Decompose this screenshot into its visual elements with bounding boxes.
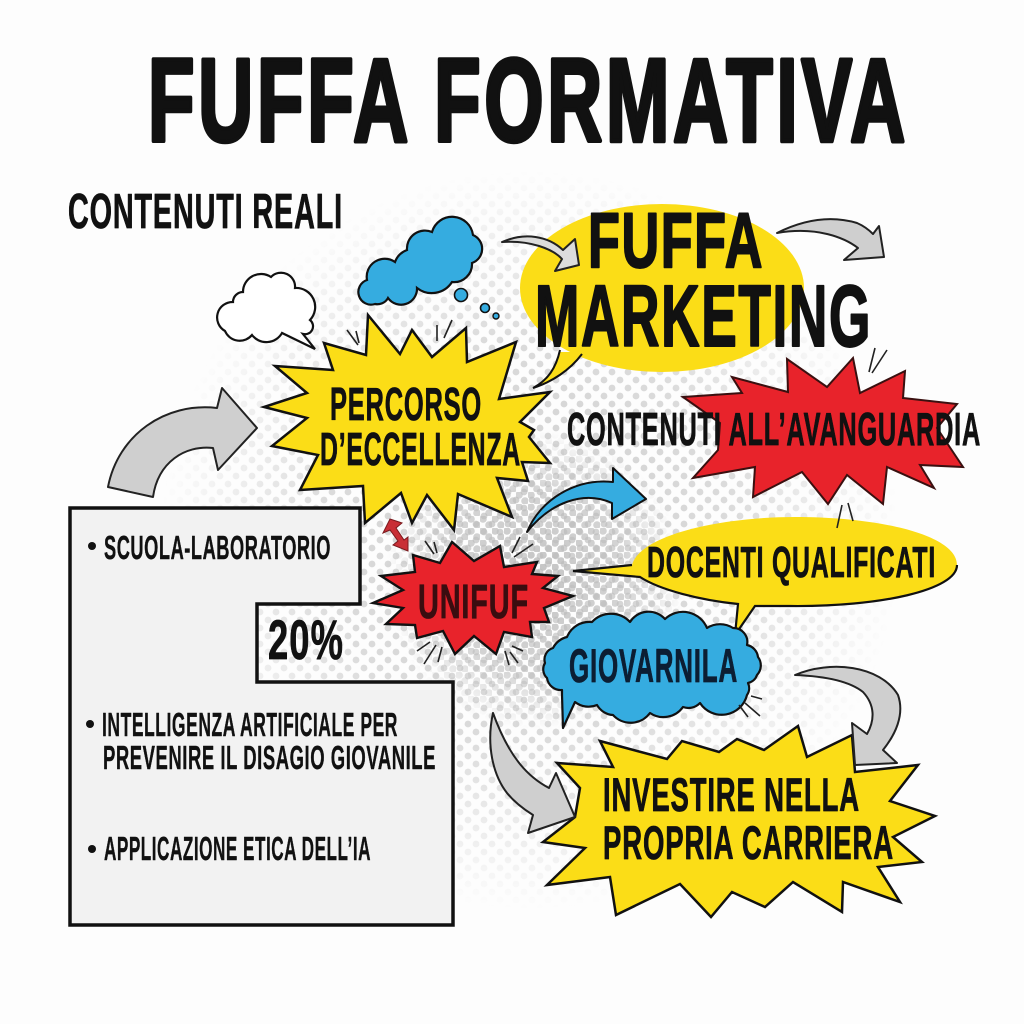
speech bubble: fuffa marketing bbox=[520, 196, 804, 388]
bullet: scuola-laboratorio bbox=[88, 529, 331, 566]
burst: investire nella propria carriera bbox=[543, 726, 935, 917]
icon: red double arrow bbox=[383, 519, 408, 551]
speech bubble: docenti qualificati bbox=[573, 517, 957, 635]
stat: 20%: 20% bbox=[268, 608, 344, 671]
icon: white thought cloud bbox=[217, 273, 315, 349]
arrow: gray into career burst, right bbox=[795, 667, 900, 765]
panel: contenuti reali box bbox=[70, 508, 453, 925]
bullet: applicazione etica bbox=[88, 830, 371, 867]
burst: percorso d'eccellenza bbox=[264, 315, 550, 530]
arrow: blue curved bbox=[527, 468, 646, 532]
bullet: intelligenza artificiale: INTELLIGENZA ARTIFICIALE PER bbox=[102, 706, 398, 743]
bullet: intelligenza artificiale bbox=[86, 706, 436, 776]
accent tick marks bbox=[347, 320, 887, 717]
infographic canvas bbox=[68, 56, 980, 927]
burst: red avanguardia bbox=[683, 358, 963, 504]
label: unifuf: UNIFUF bbox=[418, 576, 529, 629]
arrow: big gray curved bbox=[108, 388, 257, 497]
label: d'eccellenza: D’ECCELLENZA bbox=[320, 423, 521, 475]
speech bubble: giovarnila bbox=[543, 612, 761, 728]
label: giovarnila: GIOVARNILA bbox=[569, 639, 738, 692]
icon: blue thought cloud bbox=[358, 217, 499, 319]
arrow: gray into fuffa bubble bbox=[502, 236, 579, 271]
burst: unifuf bbox=[373, 542, 573, 654]
arrow: gray top right bbox=[777, 219, 884, 260]
label: fuffa: FUFFA bbox=[588, 196, 764, 284]
bullet: scuola-laboratorio: SCUOLA-LABORATORIO bbox=[104, 529, 331, 566]
bullet: intelligenza artificiale: PREVENIRE IL DISAGIO GIOVANILE bbox=[103, 739, 436, 776]
arrow: gray into career burst, left bbox=[490, 713, 575, 833]
bullet: applicazione etica: APPLICAZIONE ETICA DELL’IA bbox=[104, 830, 371, 867]
label: percorso: PERCORSO bbox=[330, 378, 482, 430]
heading: contenuti reali: CONTENUTI REALI bbox=[68, 185, 343, 239]
